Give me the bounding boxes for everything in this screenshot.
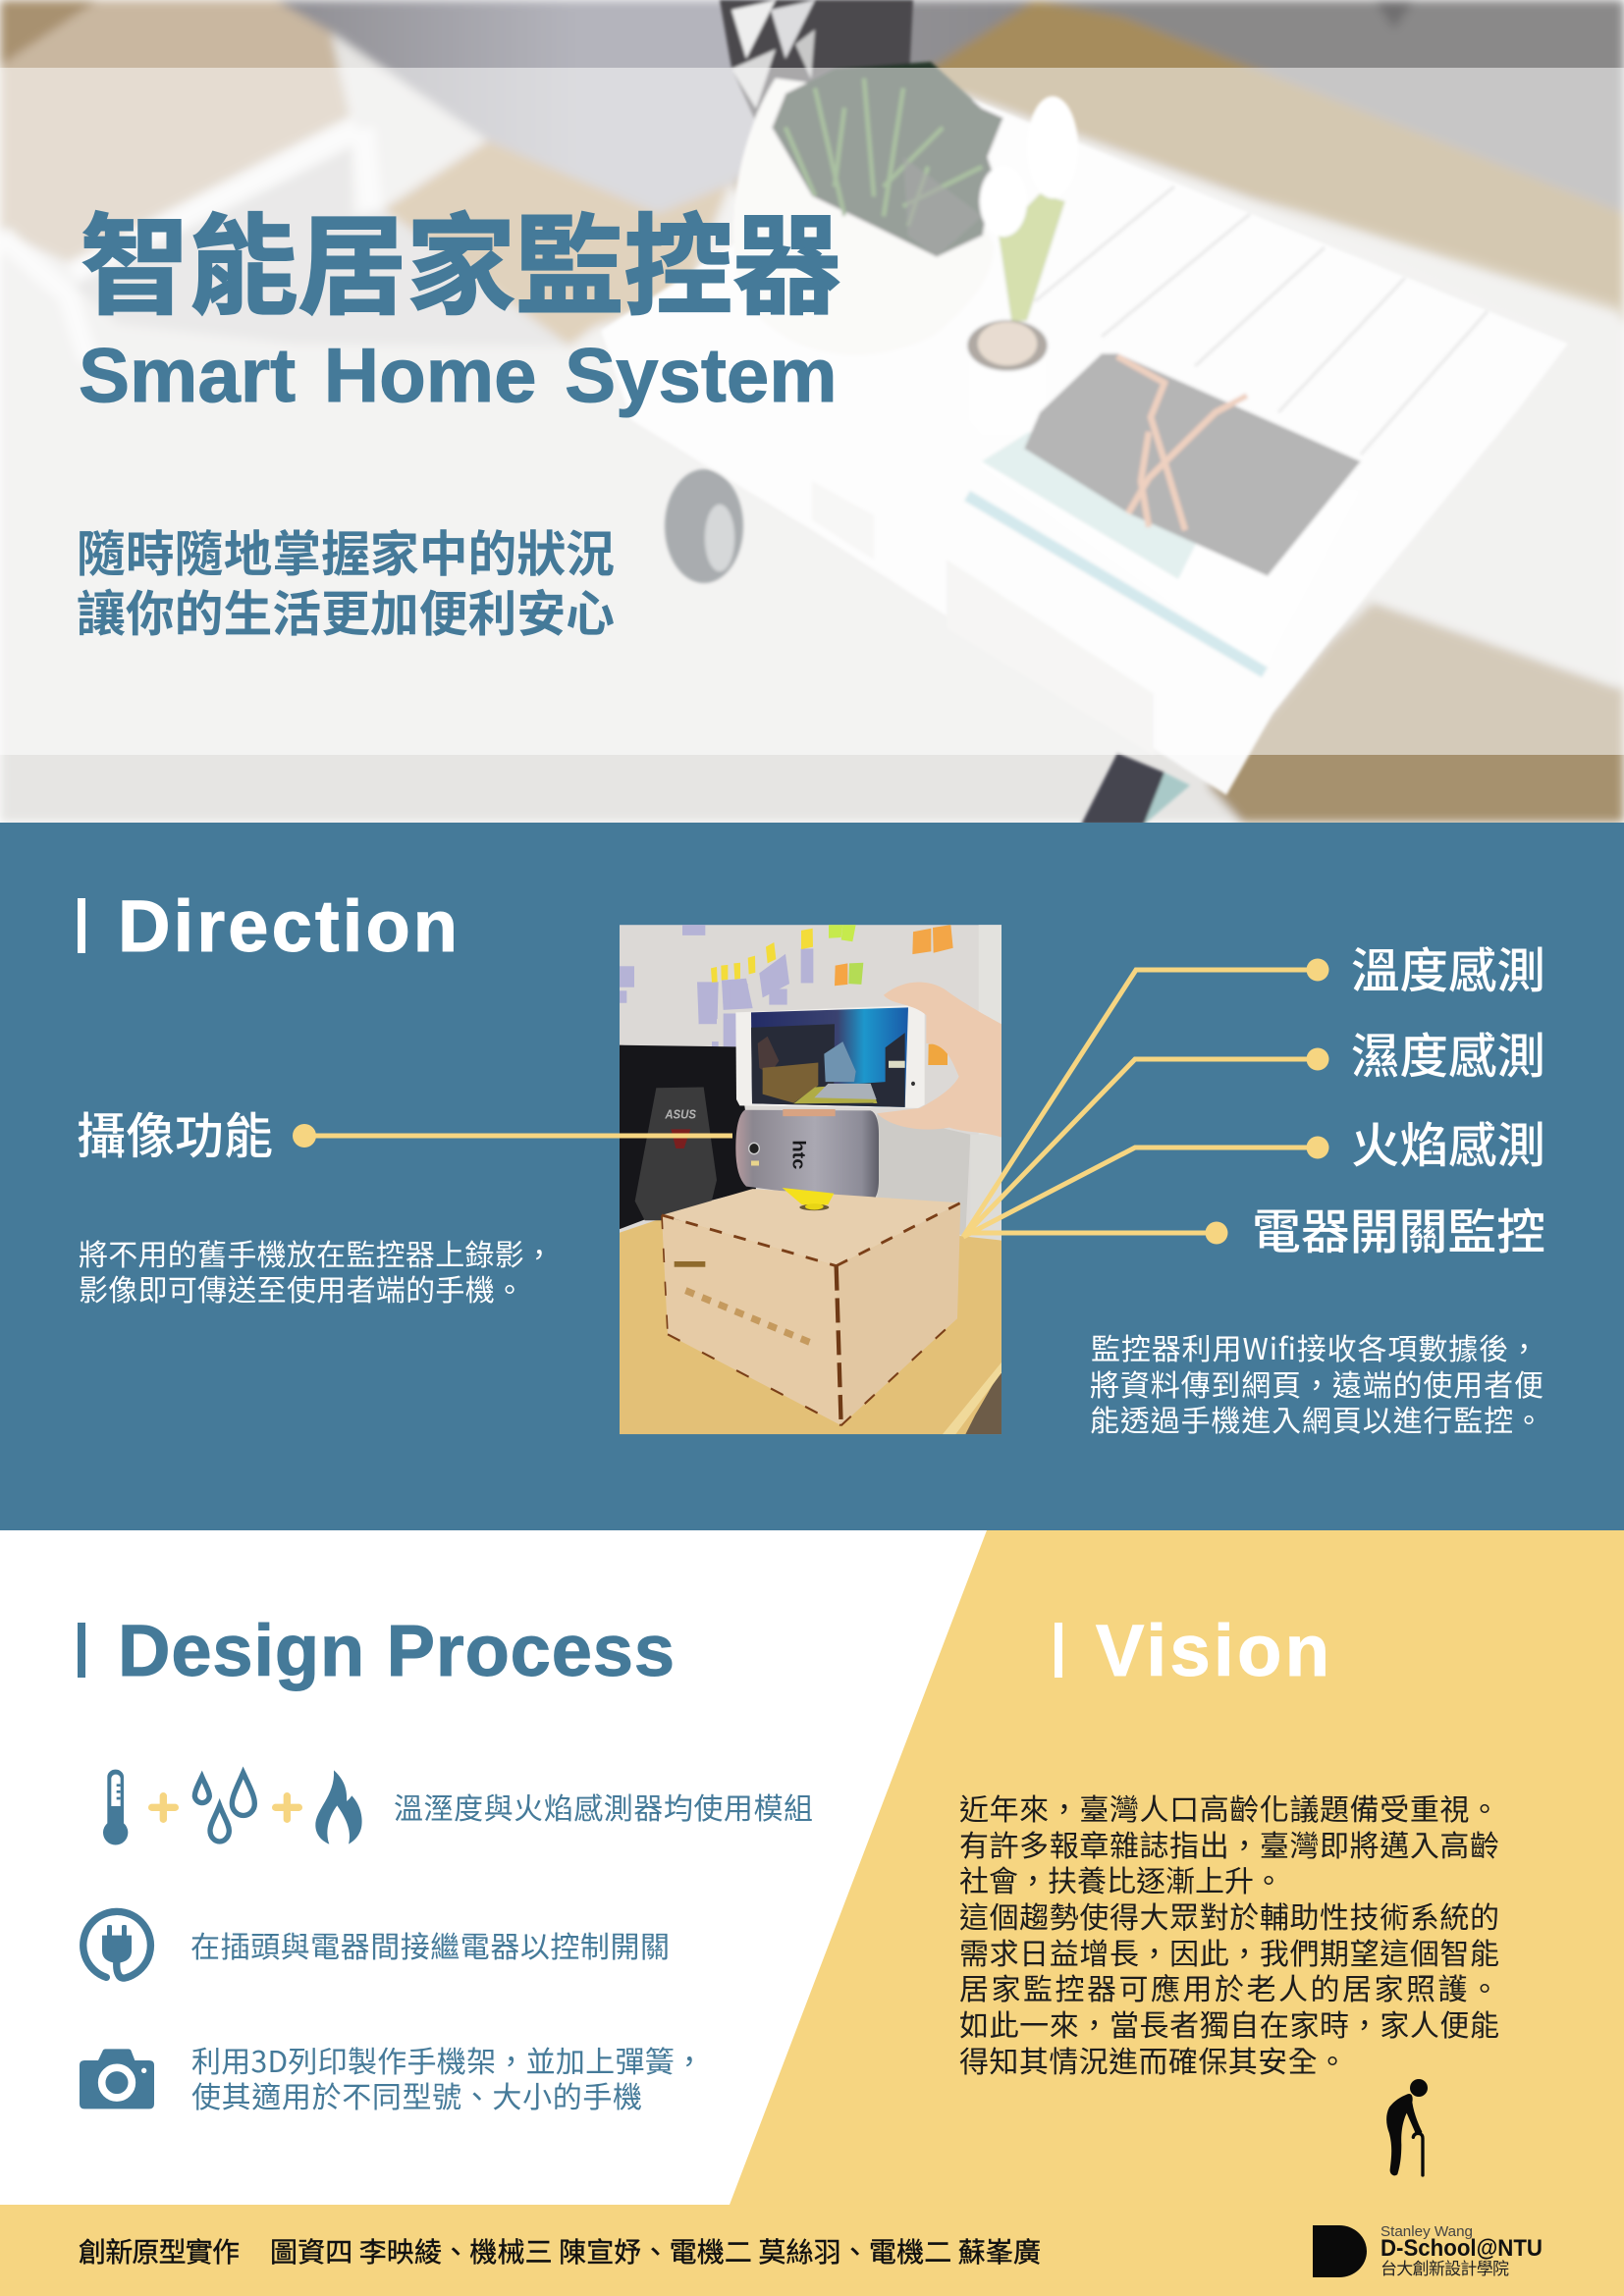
logo: D-School@NTU: D-School@NTU	[1380, 2235, 1543, 2262]
white phone	[735, 1005, 925, 1108]
large planter	[735, 77, 812, 215]
camera description: 將不用的舊手機放在監控器上錄影，	[79, 1231, 554, 1274]
hyacinth	[999, 193, 1065, 321]
vision heading: Vision	[1096, 1610, 1329, 1691]
felt case	[1024, 353, 1361, 576]
footer credits: 圖資四 李映綾、機械三 陳宣妤、電機二 莫絲羽、電機二 蘇峯廣	[270, 2231, 1041, 2270]
title: 智能居家監控器	[81, 178, 841, 336]
hand	[877, 982, 1001, 1138]
silver phone: htc	[788, 1140, 809, 1170]
design process heading: Design Process	[118, 1610, 675, 1691]
process step 3: camera: 使其適用於不同型號、大小的手機	[191, 2073, 642, 2116]
direction heading: Direction	[118, 885, 458, 967]
process step 2: plug: 在插頭與電器間接繼電器以控制開關	[190, 1923, 670, 1966]
wheels	[665, 469, 743, 583]
vision text: 居家監控器可應用於老人的居家照護。	[959, 1965, 1499, 2008]
subtitle: Smart Home System	[79, 332, 838, 418]
panel: vision background	[0, 1530, 1624, 2296]
process step 3: camera	[80, 2038, 704, 2116]
sensor labels: 濕度感測	[1351, 1018, 1545, 1088]
sensor labels	[1252, 933, 1545, 1263]
patterned pillow	[720, 0, 913, 123]
wooden box	[662, 1188, 960, 1425]
callout: camera function	[77, 1097, 732, 1168]
icon: elderly person with cane	[1386, 2079, 1428, 2175]
vision text: 社會，扶養比逐漸上升。	[959, 1857, 1283, 1900]
sensor labels: 電器開關監控	[1252, 1194, 1545, 1263]
sensing description	[1090, 1325, 1543, 1440]
plant	[772, 62, 1003, 257]
photo: prototype with phones: ASUS	[664, 1107, 697, 1122]
tagline	[77, 515, 615, 646]
logo: D-School@NTU: 台大創新設計學院	[1380, 2255, 1509, 2279]
vision text: 有許多報章雜誌指出，臺灣即將邁入高齡	[959, 1822, 1499, 1865]
vision text: 這個趨勢使得大眾對於輔助性技術系統的	[959, 1894, 1499, 1937]
vision text: 需求日益增長，因此，我們期望這個智能	[959, 1930, 1499, 1973]
logo: D-School@NTU	[1313, 2223, 1543, 2279]
sensing description: 監控器利用Wifi接收各項數據後，	[1091, 1325, 1539, 1368]
hero photo background	[0, 0, 1624, 825]
photo: prototype with phones	[620, 925, 1001, 1434]
process step 1: sensors: 溫溼度與火焰感測器均使用模組	[394, 1785, 813, 1828]
icons: thermometer, drops, flame	[103, 1770, 362, 1845]
panel: direction	[0, 823, 1624, 1530]
silver phone	[735, 1109, 879, 1202]
vision text: 近年來，臺灣人口高齡化議題備受重視。	[959, 1786, 1499, 1829]
pallet table	[601, 95, 1568, 795]
books	[978, 439, 1360, 670]
sensor labels: 火焰感測	[1351, 1107, 1545, 1177]
tagline: 讓你的生活更加便利安心	[77, 575, 615, 646]
vision text: 如此一來，當長者獨自在家時，家人便能	[959, 2002, 1499, 2045]
sensing description: 將資料傳到網頁，遠端的使用者便	[1090, 1362, 1543, 1405]
callout lines: sensors	[963, 958, 1329, 1245]
tagline: 隨時隨地掌握家中的狀況	[77, 515, 615, 586]
camera description: 影像即可傳送至使用者端的手機。	[79, 1266, 524, 1309]
camera description	[79, 1231, 554, 1309]
small pot	[967, 353, 1048, 437]
process step 1: sensors	[103, 1770, 813, 1845]
icon: camera	[80, 2049, 154, 2109]
hero translucent overlay band	[0, 68, 1624, 755]
vision text: 得知其情況進而確保其安全。	[959, 2038, 1347, 2081]
callout: camera function: 攝像功能	[77, 1097, 273, 1168]
footer credits: 創新原型實作	[79, 2231, 240, 2270]
sensor labels: 溫度感測	[1351, 933, 1545, 1002]
sensing description: 能透過手機進入網頁以進行監控。	[1090, 1397, 1543, 1440]
vision text	[959, 1786, 1499, 2081]
logo: D-School@NTU: Stanley Wang	[1380, 2223, 1473, 2240]
process step 3: camera: 利用3D列印製作手機架，並加上彈簧，	[191, 2038, 704, 2081]
process step 2: plug	[83, 1911, 670, 1978]
icon: plug	[83, 1911, 150, 1978]
